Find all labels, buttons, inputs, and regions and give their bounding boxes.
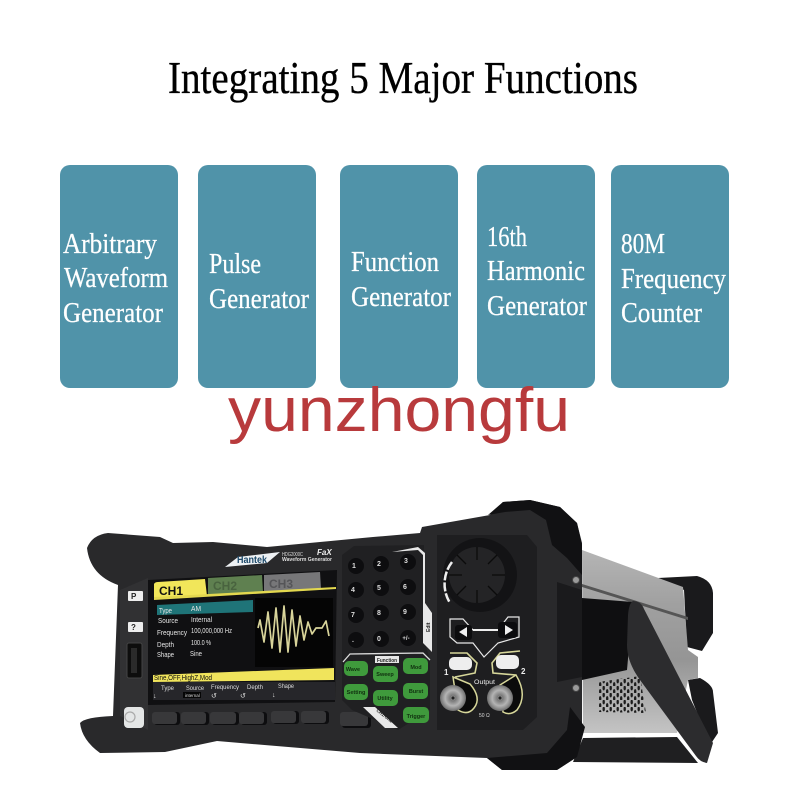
function keys: Utility [377,696,394,702]
softkey labels: ↓ [272,692,276,699]
device rear housing [573,550,718,763]
corner bumper: bottom right [487,707,585,770]
number keys: 1 [352,563,356,570]
output buttons: Output [474,680,495,686]
parameter list: Depth [157,640,174,649]
softkey labels: ↺ [211,693,217,700]
display screen [148,570,337,705]
card: 16th harmonic generator: Harmonic [487,255,585,287]
function keys: Function [377,658,397,664]
number keys: 9 [403,609,407,616]
softkey labels: Depth [247,684,263,691]
number keys: 3 [404,558,408,565]
carrying handle [582,598,713,763]
card: pulse generator [198,165,316,388]
output buttons: 1 [444,668,449,677]
function keys [343,653,430,728]
arrow keys [450,617,519,657]
card: 80M frequency counter: Frequency [621,263,726,295]
waveform plot [255,598,333,667]
softkey labels: internal [185,693,200,698]
function keys: Trigger [407,714,426,720]
softkey labels [153,682,335,700]
output buttons [444,651,526,686]
parameter list: Shape [157,650,174,659]
BNC connectors: 50 Ω [479,713,490,719]
parameter list: Frequency [157,628,187,637]
function keys: Setting [347,690,365,696]
softkey labels: Shape [278,683,294,690]
card: 80M frequency counter [611,165,729,388]
side buttons and USB port: ? [131,623,136,632]
parameter list: Type [159,606,172,615]
right control panel [437,535,537,730]
title: Integrating 5 Major Functions [168,52,638,103]
number keys [348,554,416,648]
parameter list: 100.0 % [191,638,211,647]
function keys: Sweep [376,672,394,678]
softkey labels: ↺ [240,693,246,700]
BNC connectors [440,675,522,719]
front bezel [80,500,582,770]
softkey labels: Frequency [211,684,240,691]
status bar: Sine,OFF,HighZ,Mod [154,673,212,682]
card: 16th harmonic generator: Generator [487,290,587,322]
function keys: CH1/CH2 [375,708,394,724]
card: function generator: Generator [351,281,451,313]
brand label: FaX [317,548,332,557]
softkey buttons [152,711,371,728]
number keys: 8 [377,610,381,617]
side buttons and USB port [124,591,144,728]
parameter list: Internal [191,615,212,624]
brand label: HDG2000C [282,552,303,558]
card: arbitrary waveform generator: Arbitrary [63,228,157,260]
vent grille [598,676,646,713]
number keys: 6 [403,584,407,591]
number keys: . [352,637,354,644]
number keys: 4 [351,587,355,594]
card: pulse generator: Generator [209,283,309,315]
side grip block [557,582,582,682]
brand label [225,548,332,567]
softkey labels: ↓ [153,693,156,700]
output buttons: 2 [521,667,526,676]
side buttons and USB port: P [131,592,137,601]
channel tabs: CH1 [159,584,183,598]
card: arbitrary waveform generator: Generator [63,297,163,329]
number keys: +/- [402,636,410,642]
card: 80M frequency counter: Counter [621,297,702,329]
rotary knob [443,538,517,612]
function keys: Mod [410,665,422,671]
status bar [153,668,334,682]
keypad panel: Edit [426,622,432,632]
corner bumper: top right [488,500,582,575]
function keys: Burst [409,689,423,695]
card: arbitrary waveform generator [60,165,178,388]
channel tabs [154,572,336,600]
brand label: Hantek [237,555,267,566]
parameter list: Sine [190,649,202,658]
card: arbitrary waveform generator: Waveform [64,262,168,294]
card: function generator: Function [351,246,439,278]
watermark: yunzhongfu [228,376,570,445]
softkey labels: Source [186,685,204,692]
channel tabs: CH2 [213,579,237,593]
card: 80M frequency counter: 80M [621,228,665,260]
parameter list: AM [191,604,201,613]
card: 16th harmonic generator [477,165,595,388]
brand label: Waveform Generator [282,557,332,563]
card: 16th harmonic generator: 16th [487,221,527,253]
side screws [572,576,580,692]
device: waveform generator [80,500,718,770]
card: pulse generator: Pulse [209,248,261,280]
number keys: 2 [377,561,381,568]
function keys: Wave [346,667,360,673]
keypad panel [342,545,432,730]
card: function generator [340,165,458,388]
parameter list: 100,000,000 Hz [191,626,232,635]
parameter list: Source [158,616,178,625]
parameter list [157,600,253,659]
panel: function cards [60,165,729,388]
number keys: 5 [377,585,381,592]
channel tabs: CH3 [269,577,293,591]
number keys: 0 [377,636,381,643]
number keys: 7 [351,612,355,619]
softkey labels: Type [161,685,174,692]
